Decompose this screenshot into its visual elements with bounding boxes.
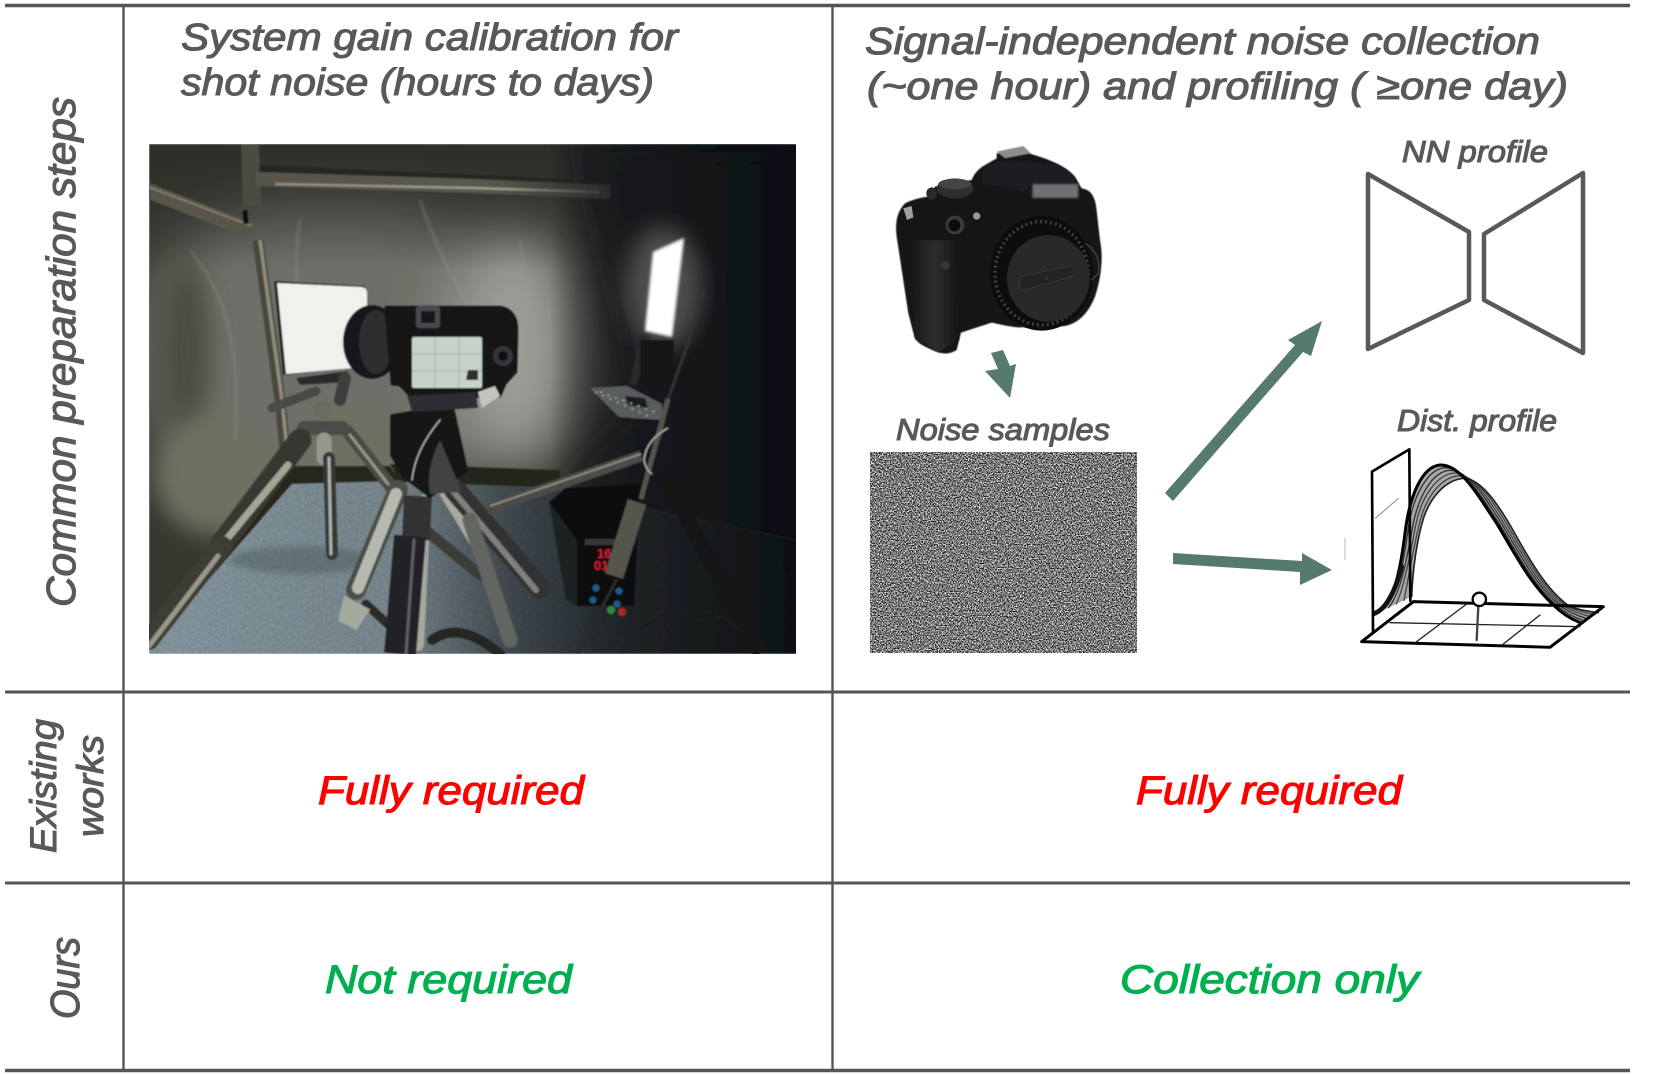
shutter area — [946, 216, 964, 234]
label: Noise samples: Noise samples — [896, 412, 1110, 447]
power supply box: 16 — [597, 546, 611, 561]
decorative sliver beside the sketch — [1344, 538, 1346, 560]
row label: Common preparation steps: Common preparation steps — [38, 97, 84, 607]
mode dial — [937, 178, 973, 198]
hot shoe — [997, 146, 1031, 158]
row label: Existing works: Existing — [23, 719, 64, 853]
lens mount ring and cap — [990, 216, 1093, 331]
icon: distribution profile sketch — [1362, 449, 1603, 647]
noise sample image — [870, 452, 1137, 653]
status: ours, gain calibration: Not required — [325, 958, 574, 1002]
heading: signal-independent noise collection: Signal-independent noise collection — [865, 21, 1540, 63]
wall lighting — [135, 144, 800, 654]
light stand — [487, 399, 761, 654]
row label: Existing works: works — [70, 735, 111, 837]
heading: system gain calibration — [181, 17, 679, 104]
small tripod — [149, 378, 392, 646]
white reflector panel — [274, 281, 367, 385]
arrow: camera to noise samples — [985, 350, 1016, 398]
row label: Existing works — [23, 719, 111, 853]
mirrorless camera — [343, 305, 517, 412]
status: existing works, gain calibration: Fully required — [318, 769, 586, 813]
carpet floor — [149, 464, 796, 654]
light panel with glow — [626, 226, 702, 388]
grip — [912, 240, 959, 352]
label: Dist. profile: Dist. profile — [1397, 403, 1557, 438]
status: existing works, noise collection: Fully required — [1136, 769, 1404, 813]
icon: DSLR camera body: c — [1045, 275, 1049, 282]
icon: NN encoder-decoder profile — [1368, 173, 1583, 353]
status: ours, noise collection: Collection only — [1120, 958, 1422, 1002]
heading: system gain calibration: shot noise (hours to days) — [181, 62, 654, 104]
heading: signal-independent noise collection: (~one hour) and profiling ( ≥one day) — [867, 66, 1568, 108]
perforated plate and cable — [590, 336, 691, 440]
viewfinder prism — [982, 161, 1078, 192]
power supply box: 01 — [594, 558, 608, 573]
photo: calibration setup in a dark tent — [135, 144, 800, 654]
main tripod — [340, 406, 540, 654]
power supply box — [549, 484, 640, 616]
label: NN profile: NN profile — [1402, 134, 1548, 169]
heading: system gain calibration: System gain calibration for — [181, 17, 679, 59]
icon: DSLR camera body — [896, 146, 1102, 354]
arrow: noise to NN profile — [1165, 321, 1322, 501]
frame pipes — [146, 144, 610, 460]
arrow: noise to distribution profile — [1173, 553, 1332, 585]
heading: signal-independent noise collection — [865, 21, 1568, 108]
row label: Ours: Ours — [42, 937, 88, 1019]
